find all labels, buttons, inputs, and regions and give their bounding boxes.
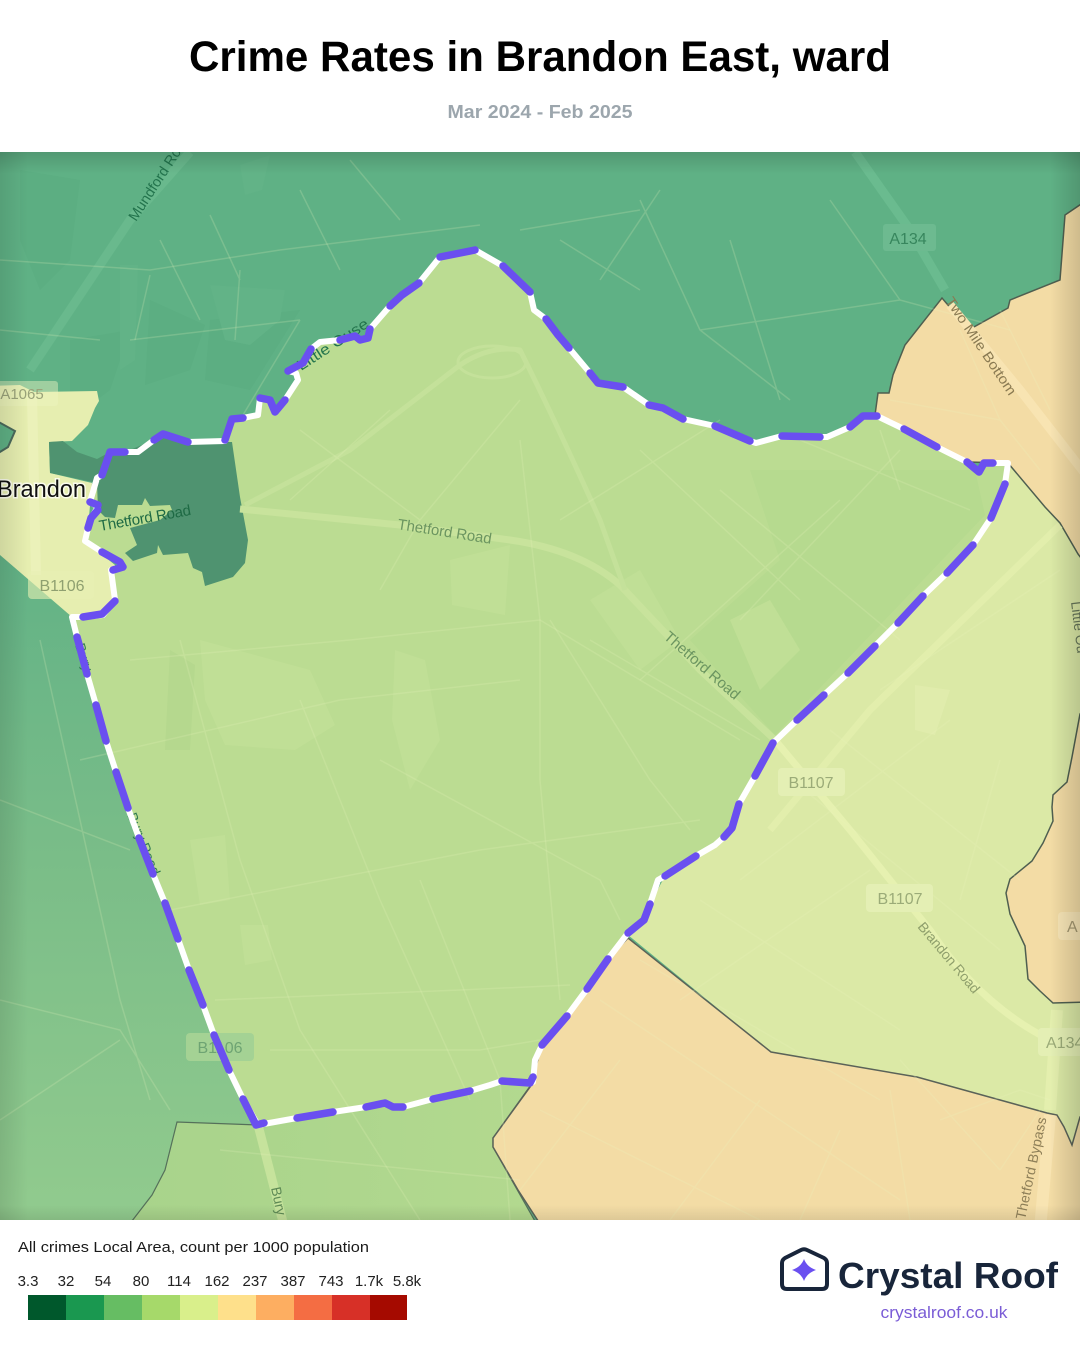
map label: B1107 road badge upper bbox=[778, 768, 845, 796]
icon: house with star bbox=[782, 1249, 827, 1289]
title: Crime Rates in Brandon East, ward bbox=[189, 33, 891, 81]
legend colour bar bbox=[28, 1295, 407, 1320]
logo: Crystal Roof bbox=[782, 1249, 1059, 1322]
map label: Bury Road fragment lower west: Bury Road bbox=[124, 810, 164, 877]
map label: B1106 road badge south: B1106 bbox=[197, 1040, 243, 1057]
map label: B1106 road badge north bbox=[28, 579, 84, 599]
map detail: minor road grid bbox=[0, 160, 1060, 1220]
map region: southern peach area bbox=[493, 938, 1080, 1230]
map label: Two Mile Bottom: Two Mile Bottom bbox=[943, 294, 1020, 398]
map edge vignette bbox=[0, 152, 1080, 1220]
legend scale values: 387 bbox=[280, 1273, 306, 1290]
legend scale values: 32 bbox=[58, 1273, 74, 1290]
legend bbox=[18, 1239, 422, 1320]
legend scale values bbox=[18, 1273, 422, 1290]
map region: small teal inlet bbox=[0, 420, 15, 455]
map label: Little Ouse: Little Ouse bbox=[294, 315, 372, 374]
legend title: All crimes Local Area, count per 1000 population bbox=[18, 1239, 369, 1256]
legend scale values: 1.7k bbox=[355, 1273, 384, 1290]
legend scale values: 54 bbox=[95, 1273, 111, 1290]
ward boundary: white outline bbox=[72, 250, 1008, 1125]
map label: B1107 road badge lower bbox=[866, 884, 933, 912]
legend scale values: 80 bbox=[133, 1273, 149, 1290]
map label: Mundford Road: Mundford Road bbox=[126, 132, 194, 224]
map region: western green strip bbox=[0, 620, 252, 1220]
map label: Bury Road fragment on west side: Bury bbox=[72, 641, 96, 673]
map label: A134 badge on peach strip bbox=[1058, 912, 1080, 940]
legend scale values: 114 bbox=[167, 1273, 191, 1290]
map region: dark green Brandon neighbourhood bbox=[49, 434, 248, 586]
map label: B1107 road badge upper: B1107 bbox=[788, 775, 834, 792]
legend scale values: 743 bbox=[318, 1273, 344, 1290]
map detail: ward field patches bbox=[165, 470, 985, 965]
map region: bottom green area bbox=[132, 1084, 535, 1220]
map label: A1065 road badge bbox=[0, 381, 58, 399]
map label: A134 badge east bbox=[1038, 1028, 1080, 1056]
map label: A134 badge on peach strip: A bbox=[1067, 919, 1078, 936]
ward boundary: purple dashes bbox=[77, 250, 1005, 1125]
map label: A134 road badge: A134 bbox=[889, 231, 927, 248]
map label: Thetford Road central: Thetford Road bbox=[396, 516, 493, 548]
website url: crystalroof.co.uk bbox=[880, 1304, 1008, 1322]
legend scale values: 162 bbox=[204, 1273, 230, 1290]
map region: northern dark green area bbox=[0, 152, 1080, 1220]
map detail: northern woodland patches bbox=[20, 170, 300, 420]
map region: eastern light green area bbox=[628, 463, 1080, 1150]
map label: A134 road badge bbox=[883, 224, 936, 251]
map detail: major roads bbox=[30, 152, 1080, 1230]
map label: A1065 road badge: A1065 bbox=[0, 386, 44, 403]
map label: Thetford Road in the dark area: Thetford Road bbox=[98, 502, 192, 535]
map label: B1106 road badge north: B1106 bbox=[39, 578, 85, 595]
legend scale values: 3.3 bbox=[18, 1273, 38, 1290]
map label: B1107 road badge lower: B1107 bbox=[877, 891, 923, 908]
map region: eastern peach strip bbox=[1006, 700, 1080, 1003]
legend scale values: 5.8k bbox=[393, 1273, 422, 1290]
map label: B1106 road badge south bbox=[186, 1033, 254, 1061]
map region: Brandon East ward fill bbox=[72, 250, 1008, 1125]
legend scale values: 237 bbox=[242, 1273, 268, 1290]
map region: Brandon town pale area bbox=[0, 385, 115, 617]
map label: Thetford Road east: Thetford Road bbox=[660, 628, 743, 703]
map label: Bury Road: Bury bbox=[268, 1185, 290, 1217]
map detail: northern lighter patches bbox=[120, 155, 285, 370]
map region: north-eastern peach area bbox=[875, 198, 1080, 570]
map label: Brandon Road: Brandon Road bbox=[915, 919, 984, 996]
map label: Thetford Bypass: Thetford Bypass bbox=[1012, 1116, 1050, 1221]
subtitle: date range: Mar 2024 - Feb 2025 bbox=[448, 101, 632, 122]
brand name: Crystal Roof bbox=[838, 1255, 1059, 1296]
